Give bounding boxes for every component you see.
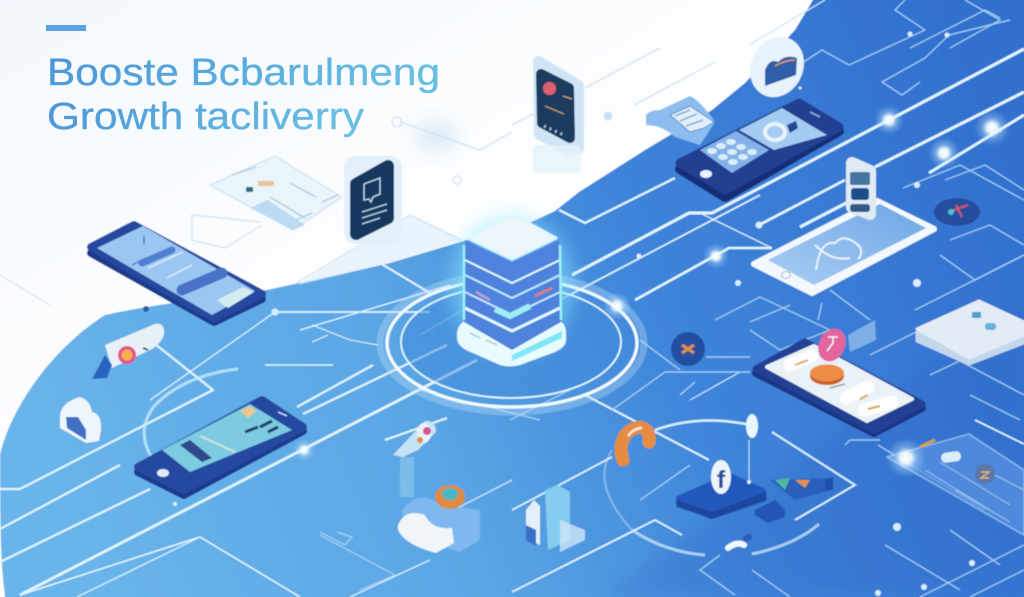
title xyxy=(47,52,440,138)
dark round badge upper right xyxy=(934,198,980,226)
circuit lines: pale lines on white area xyxy=(0,0,825,305)
pink check badge xyxy=(813,324,851,366)
title line 2: Growth tacliverry xyxy=(47,96,364,138)
server box body xyxy=(464,240,561,350)
bottom-left phone xyxy=(138,400,303,495)
central server stack xyxy=(450,215,574,366)
tablet device top xyxy=(533,62,581,173)
small pill capsule xyxy=(728,533,753,548)
top-left phone xyxy=(91,225,262,322)
document panel xyxy=(210,156,342,230)
white phone with cloud xyxy=(754,201,934,293)
bar chart icon xyxy=(526,485,585,552)
circuit lines: thin right-hand traces xyxy=(320,0,1024,597)
circle around facebook tile xyxy=(604,421,855,555)
network nodes xyxy=(173,32,1002,596)
server layer chevrons xyxy=(465,260,560,331)
colored pennant blocks xyxy=(755,477,833,523)
cloud with orange disc icon xyxy=(398,485,480,553)
top right dark phone xyxy=(680,103,839,197)
orange headset arc xyxy=(621,427,649,460)
facebook tile: f xyxy=(717,466,726,494)
right phone with orange disc xyxy=(756,342,922,433)
receipt note xyxy=(646,96,715,145)
floating icon card xyxy=(850,163,870,214)
translucent tablet lower right xyxy=(887,434,1024,535)
server data highlights xyxy=(476,288,552,316)
signpost badge icon xyxy=(393,421,436,497)
cloud folder circle icon xyxy=(740,28,814,106)
translucent panel left of server xyxy=(297,215,462,285)
server glow xyxy=(450,215,574,355)
facebook tile xyxy=(677,460,766,519)
title line 1: Booste Bcbarulmeng xyxy=(47,52,440,94)
server base xyxy=(457,318,566,366)
arc around bottom-left phone xyxy=(144,369,238,458)
dark chat card xyxy=(344,156,402,244)
title accent bar xyxy=(46,25,86,31)
small blue tile behind pink badge xyxy=(848,320,876,352)
rocket icon xyxy=(92,306,164,379)
ring around central server xyxy=(380,274,644,412)
glowing pin xyxy=(746,414,758,484)
white isometric card xyxy=(917,301,1024,364)
small orange node badge xyxy=(671,332,705,366)
light flares xyxy=(293,105,1010,478)
background: darker lower-right tint xyxy=(600,300,1024,597)
server top face xyxy=(468,215,556,259)
cloud lock icon xyxy=(60,397,101,443)
background: pale haze xyxy=(414,122,458,150)
server cyan edges xyxy=(464,245,561,320)
